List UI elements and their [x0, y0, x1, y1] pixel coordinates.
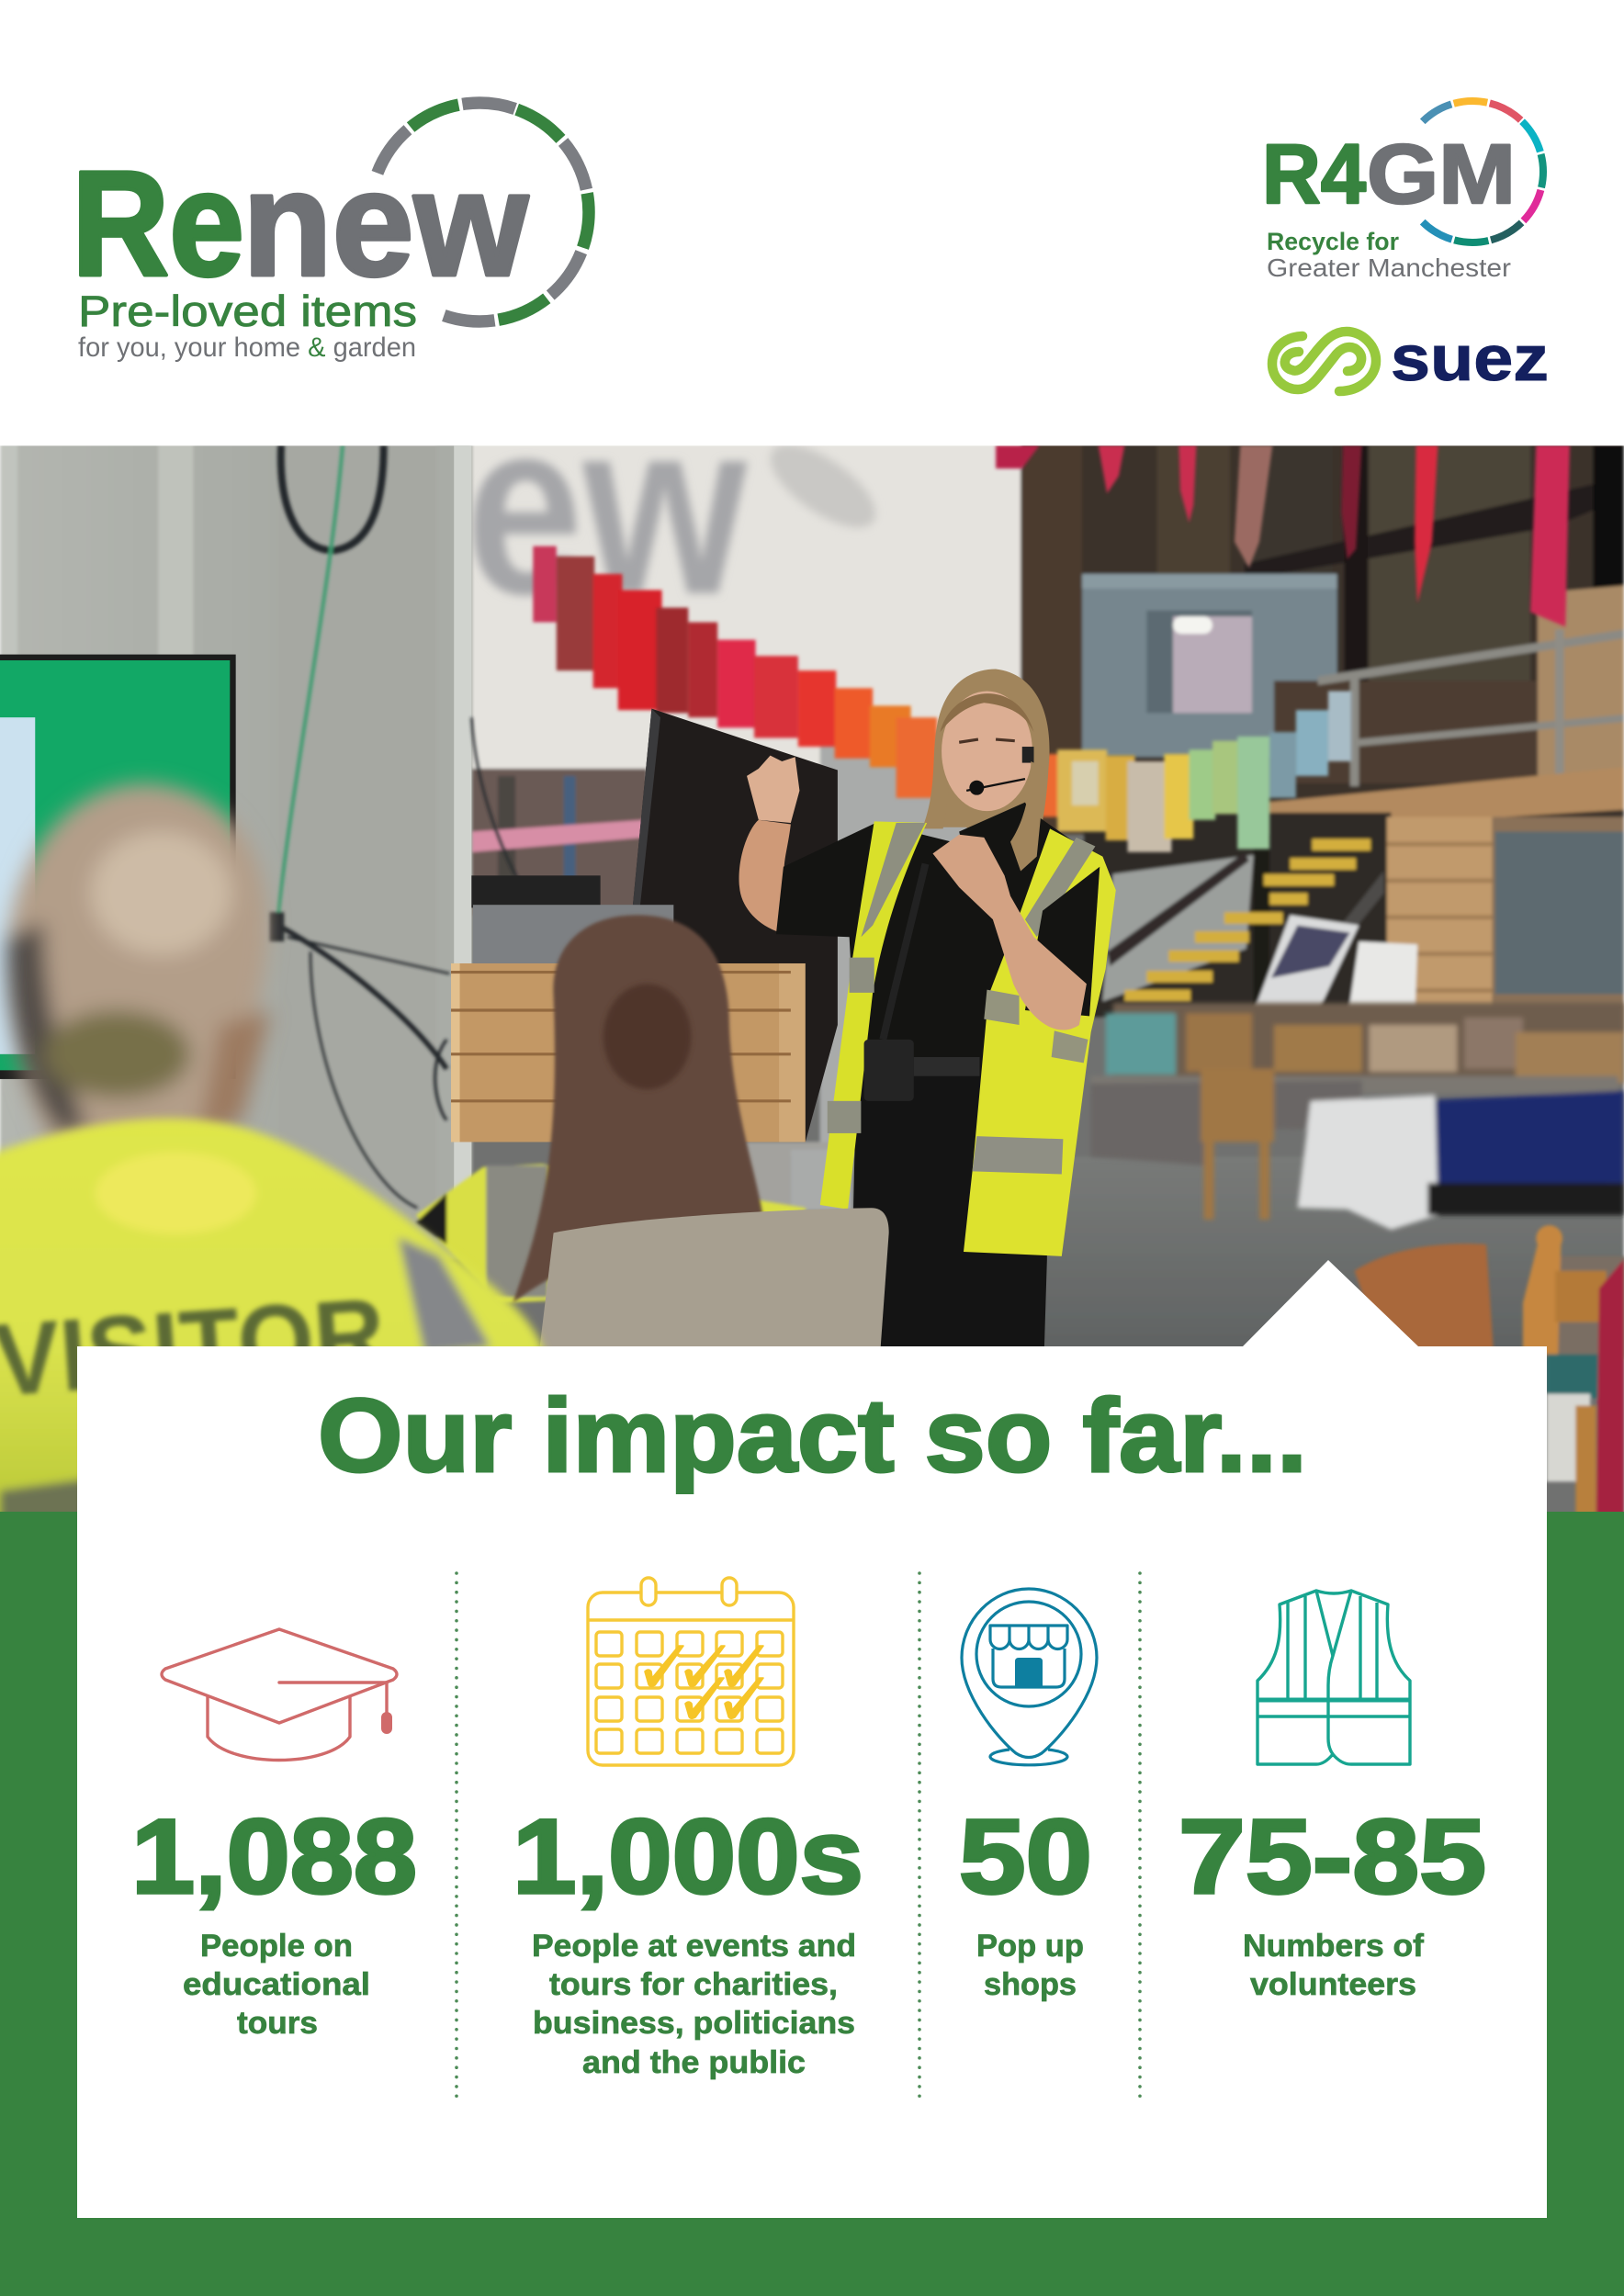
label: people at events and tours: tours for charities, [549, 1967, 838, 2002]
visitor hair [513, 915, 764, 1303]
SUEZ swirl [1272, 332, 1376, 391]
icon: graduation cap [162, 1629, 397, 1760]
R4GM coloured ring [1402, 101, 1543, 242]
icon: hi-vis vest [1257, 1591, 1410, 1764]
logo: R4GM [1262, 101, 1543, 282]
photo: pillar highlight [454, 439, 471, 1215]
Renew wordmark [72, 140, 529, 307]
photo: background tables and displays [1091, 1003, 1624, 1230]
speaker forearm and hand [933, 835, 1087, 1030]
photo: banner lettering: ew [466, 369, 748, 647]
photo: wall pillar edge [436, 439, 471, 1215]
label: people on educational tours: People on [200, 1929, 353, 1964]
Renew tagline: Pre-loved items [78, 287, 417, 335]
photo background: warehouse interior [0, 439, 1624, 1523]
speaker hand [747, 756, 799, 823]
Renew dashed ring [370, 103, 589, 321]
number: 1,088: 1,088 [131, 1798, 417, 1916]
speaker shirt [776, 818, 1073, 1060]
stat: pop up shops [959, 1589, 1097, 2002]
R4GM wordmark [1262, 128, 1516, 221]
label: numbers of volunteers: volunteers [1250, 1967, 1416, 2002]
number: 50: 50 [959, 1798, 1092, 1916]
R4GM wordmark: R4 [1262, 128, 1366, 221]
label: people at events and tours: business, politicians [533, 2006, 855, 2041]
photo: monitor and laptop on lectern [471, 709, 838, 1142]
panel: white content card with pointer [77, 1260, 1547, 2218]
divider dots 1 [455, 1573, 458, 2099]
label: people on educational tours [183, 1929, 370, 2041]
label: numbers of volunteers [1243, 1929, 1425, 2002]
speaker collar [959, 803, 1026, 836]
photo: foreground visitor in yellow vest [0, 783, 545, 1523]
visitor hair bun [603, 984, 691, 1089]
icon: shop location pin [962, 1589, 1097, 1765]
photo: speaker in hi-vis vest [739, 670, 1116, 1355]
photo: hanging red flags [996, 445, 1570, 626]
photo: faint banner mark [769, 446, 877, 529]
speaker hair back [924, 669, 1049, 828]
divider dots 2 [918, 1573, 921, 2099]
number: 1,000s: 1,000s [513, 1798, 863, 1916]
stat: educational tours [131, 1629, 417, 2041]
speaker lanyard and pack [864, 864, 980, 1101]
photo: cables on wall [269, 445, 535, 1208]
label: pop up shops [976, 1929, 1084, 2002]
label: numbers of volunteers: Numbers of [1243, 1929, 1425, 1964]
head [6, 783, 271, 1156]
icon: calendar with checks [588, 1578, 794, 1765]
green footer band [0, 1512, 1624, 2296]
R4GM name line 2: Greater Manchester [1267, 253, 1511, 282]
photo: wooden chairs lower right [1355, 1225, 1624, 1515]
label: people at events and tours: People at events and [532, 1929, 856, 1964]
hi-vis back [0, 1119, 545, 1523]
label: people at events and tours [532, 1929, 856, 2080]
number: 75-85: 75-85 [1179, 1798, 1486, 1916]
photo: colourful bunting [533, 546, 1351, 852]
printed VISITOR lettering: VISITOR [0, 1276, 389, 1417]
label: pop up shops: Pop up [976, 1929, 1084, 1964]
photo: speaker presenting to visitors in warehouse [0, 369, 1624, 1523]
speaker vest [820, 821, 1116, 1256]
logo: SUEZ [1272, 322, 1549, 394]
label: people at events and tours: and the public [582, 2045, 806, 2080]
R4GM wordmark: GM [1367, 128, 1516, 221]
label: people on educational tours: educational [183, 1967, 370, 2002]
visitor vest [416, 1164, 813, 1303]
stat: volunteers [1179, 1591, 1486, 2002]
photo: presentation screen [0, 655, 236, 1079]
label: people on educational tours: tours [237, 2006, 318, 2041]
Renew sub-tagline: for you, your home & garden [78, 332, 416, 363]
logo: Renew [72, 103, 589, 363]
speaker raised arm [739, 819, 791, 931]
speaker face [922, 691, 1045, 872]
speaker trousers [852, 1057, 1047, 1355]
label: pop up shops: shops [984, 1967, 1077, 2002]
photo: wooden lectern box [451, 963, 806, 1142]
heading: Our impact so far...: Our impact so far... [318, 1378, 1307, 1493]
visitor chair back [539, 1208, 889, 1355]
R4GM name line 1: Recycle for [1267, 228, 1399, 255]
divider dots 3 [1138, 1573, 1142, 2099]
stat: events and tours [513, 1578, 863, 2080]
Renew wordmark: new [242, 140, 529, 307]
Renew wordmark: Re [72, 140, 244, 307]
SUEZ wordmark: suez [1391, 322, 1549, 394]
photo: seated visitor with brown hair [416, 915, 889, 1355]
